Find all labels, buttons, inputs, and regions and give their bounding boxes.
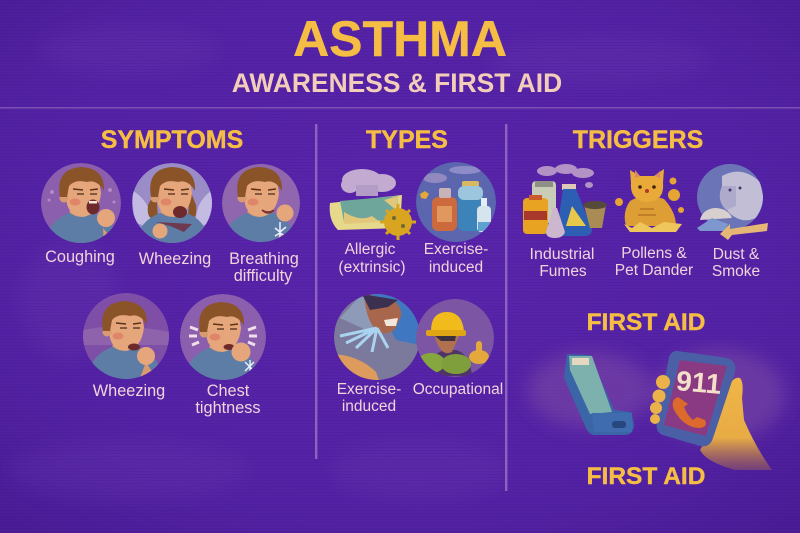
label: dust and smoke: Dust &	[713, 246, 760, 263]
label: exercise-induced	[424, 241, 488, 276]
label: pollens and pet dander	[615, 245, 693, 279]
panel: first aid	[528, 309, 785, 490]
label: allergic: Allergic	[345, 241, 396, 258]
panel: triggers	[523, 126, 768, 280]
label: breathing difficulty	[229, 250, 299, 285]
icon: exercise-induced man	[334, 294, 420, 384]
label: coughing: Coughing	[45, 248, 115, 266]
hand holding phone	[700, 378, 772, 470]
label: exercise-induced: induced	[429, 259, 483, 276]
icon: wheezing boy	[83, 293, 169, 381]
label: industrial fumes	[530, 246, 594, 280]
label: allergic: (extrinsic)	[338, 259, 406, 276]
label: exercise-induced	[337, 381, 401, 415]
label: dust and smoke: Smoke	[712, 263, 760, 280]
label: wheezing: Wheezing	[139, 250, 211, 268]
icon: dust and smoke	[697, 164, 768, 240]
icon: coughing boy	[41, 163, 121, 247]
label: allergic	[338, 241, 406, 276]
icon: phone handset	[673, 397, 706, 428]
icon: hand and phone with 911	[650, 351, 772, 470]
emergency number: 911	[675, 365, 723, 400]
panel: types	[330, 126, 503, 415]
title: ASTHMA	[293, 11, 507, 67]
subtitle: AWARENESS & FIRST AID	[232, 68, 562, 98]
label: pollens and pet dander: Pollens &	[621, 245, 687, 262]
label: exercise-induced: induced	[342, 398, 396, 415]
label: breathing difficulty: Breathing	[229, 250, 299, 268]
icon: wheezing girl	[132, 163, 212, 247]
panel: symptoms	[41, 126, 300, 417]
label: exercise-induced: Exercise-	[424, 241, 488, 258]
icon: occupational worker	[416, 299, 494, 377]
label: industrial fumes: Fumes	[539, 263, 587, 280]
icon: chest tightness boy	[180, 294, 266, 382]
icon: industrial fumes	[523, 164, 607, 238]
caption: first aid: FIRST AID	[587, 463, 705, 490]
label: chest tightness	[195, 382, 261, 417]
icon: inhaler	[564, 354, 634, 435]
heading: triggers: TRIGGERS	[573, 126, 703, 154]
label: wheezing: Wheezing	[93, 382, 165, 400]
icon: pollen and pet cat	[615, 169, 684, 232]
heading: first aid: FIRST AID	[587, 309, 705, 336]
label: occupational: Occupational	[413, 381, 503, 398]
illustration background	[528, 349, 785, 441]
icon: allergic	[330, 169, 416, 240]
icon: breathing difficulty boy	[221, 164, 300, 247]
label: breathing difficulty: difficulty	[234, 267, 293, 285]
label: exercise-induced: Exercise-	[337, 381, 401, 398]
heading: symptoms: SYMPTOMS	[101, 126, 243, 154]
label: chest tightness: Chest	[207, 382, 250, 400]
heading: types: TYPES	[366, 126, 448, 154]
label: industrial fumes: Industrial	[530, 246, 594, 263]
label: chest tightness: tightness	[195, 399, 261, 417]
label: dust and smoke	[712, 246, 760, 280]
icon: exercise-induced bottles	[416, 162, 496, 242]
label: pollens and pet dander: Pet Dander	[615, 262, 693, 279]
